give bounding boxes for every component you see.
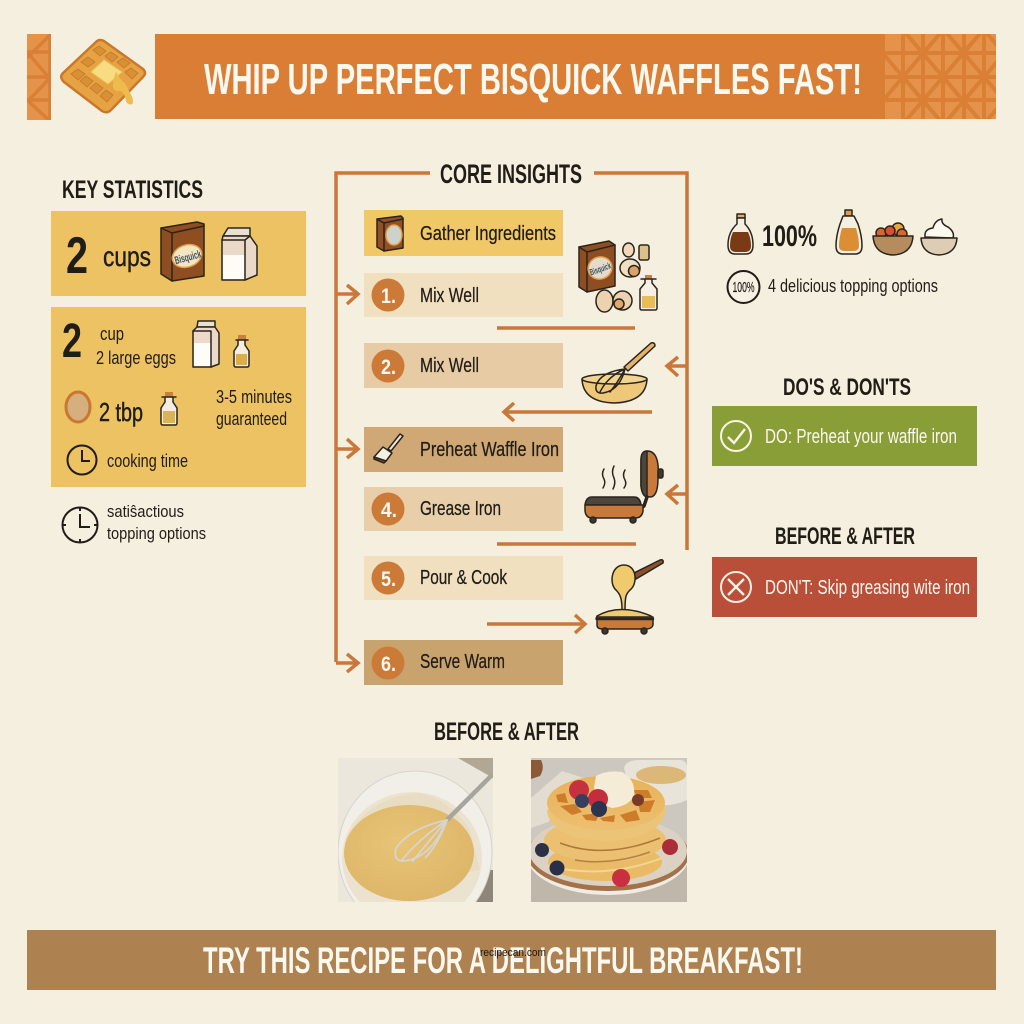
icon: oil bottle <box>234 335 249 367</box>
icon: egg <box>66 392 90 422</box>
step 2: mix well <box>364 343 563 388</box>
note: topping options with clock <box>62 502 206 543</box>
icon: pouring batter into iron <box>596 560 663 634</box>
step 5: pour and cook: Pour & Cook <box>420 567 508 589</box>
icon: fruit bowl <box>873 223 913 255</box>
header banner <box>27 34 996 120</box>
step 6: serve warm <box>364 640 563 685</box>
step 2: mix well: Mix Well <box>420 355 479 377</box>
stat card: ingredients and time: 3-5 minutes <box>216 387 292 407</box>
arrow: to step 6 <box>336 654 358 672</box>
step 4: grease iron <box>364 487 563 531</box>
panel: core insights <box>336 159 687 685</box>
icon: milk carton small <box>193 321 219 367</box>
step: gather ingredients: Gather Ingredients <box>420 223 556 245</box>
flow connector: right rail <box>594 173 687 550</box>
step 5: pour and cook <box>364 556 563 600</box>
right lattice decoration <box>885 34 996 119</box>
stat: 100%: 100% <box>762 220 817 253</box>
stat card: ingredients and time: cup <box>100 324 124 344</box>
stat card: ingredients and time: guaranteed <box>216 409 287 429</box>
step 2: mix well: 2. <box>381 356 396 379</box>
title band <box>155 34 886 119</box>
heading: before and after: BEFORE & AFTER <box>434 718 579 746</box>
icon: syrup bottle <box>728 214 753 254</box>
heading: do's and don'ts: DO'S & DON'TS <box>783 374 911 401</box>
arrow: to waffle iron <box>667 485 687 504</box>
arrow: to preheat <box>336 439 358 458</box>
step 5: pour and cook: 5. <box>381 568 396 591</box>
flow connector: left rail <box>336 173 430 662</box>
icon: milk carton <box>222 228 257 280</box>
icon: open waffle iron with steam <box>585 451 663 523</box>
note: topping options with clock: topping options <box>107 524 206 543</box>
panel: before and after photos <box>338 722 687 902</box>
panel: key statistics <box>51 176 306 543</box>
icon: waffle with butter <box>61 40 145 112</box>
note: topping options with clock: satiŝactious <box>107 502 184 521</box>
photo: batter in bowl <box>338 758 493 902</box>
connector line <box>497 326 635 330</box>
icon: ingredients group: Bisquick <box>588 260 613 277</box>
icon: brush <box>374 434 403 463</box>
footer banner <box>27 930 996 990</box>
step 4: grease iron: 4. <box>381 499 397 522</box>
icon: bowl and whisk <box>582 343 655 403</box>
watermark: recipecan.com <box>480 947 546 959</box>
left lattice decoration <box>27 34 51 122</box>
connector line <box>497 542 636 546</box>
panel: toppings stats <box>728 210 957 303</box>
divider arrow: row 2 <box>504 403 652 421</box>
icon: oil bottle <box>161 392 177 425</box>
badge: 100% <box>728 271 760 303</box>
panel: do's and don'ts <box>712 374 977 617</box>
stat card: 2 cups <box>51 211 306 296</box>
icon: whipped cream bowl <box>921 219 957 255</box>
stat card: 2 cups: 2 <box>66 227 88 285</box>
stat card: 2 cups: cups <box>103 241 151 272</box>
stat card: ingredients and time: cooking time <box>107 451 188 471</box>
arrow: to step 1 <box>336 285 358 304</box>
callout: do <box>712 406 977 466</box>
arrow: to whisk <box>667 357 687 376</box>
icon: bisquick box: Bisquick <box>173 248 203 267</box>
icon: bisquick box <box>161 222 205 281</box>
stat card: ingredients and time: 2 large eggs <box>96 348 176 368</box>
step 6: serve warm: Serve Warm <box>420 651 505 673</box>
stat card: ingredients and time <box>51 307 306 487</box>
icon: clock <box>68 446 96 474</box>
heading: before and after: BEFORE & AFTER <box>775 523 915 550</box>
callout: do: DO: Preheat your waffle iron <box>765 426 957 448</box>
icon: ingredients group <box>579 241 657 312</box>
text: topping options: 4 delicious topping options <box>768 276 938 296</box>
callout: don't <box>712 557 977 617</box>
icon: small box <box>377 216 403 251</box>
stat card: ingredients and time: 2 <box>62 315 82 368</box>
icon: honey bottle <box>836 210 862 254</box>
step 3: preheat waffle iron: Preheat Waffle Iron <box>420 439 559 461</box>
photo: stacked waffles with berries <box>527 758 689 902</box>
step 1: mix well: Mix Well <box>420 285 479 307</box>
step 3: preheat waffle iron <box>364 427 563 472</box>
badge: 100%: 100% <box>732 279 754 296</box>
step 4: grease iron: Grease Iron <box>420 498 501 520</box>
heading: core insights: CORE INSIGHTS <box>440 159 582 189</box>
divider arrow: row 5 <box>487 615 585 633</box>
step 1: mix well: 1. <box>381 285 396 308</box>
heading: key statistics: KEY STATISTICS <box>62 176 203 204</box>
step: gather ingredients <box>364 210 563 256</box>
step 1: mix well <box>364 273 563 317</box>
stat card: ingredients and time: 2 tbp <box>99 397 143 427</box>
step 6: serve warm: 6. <box>381 653 396 676</box>
